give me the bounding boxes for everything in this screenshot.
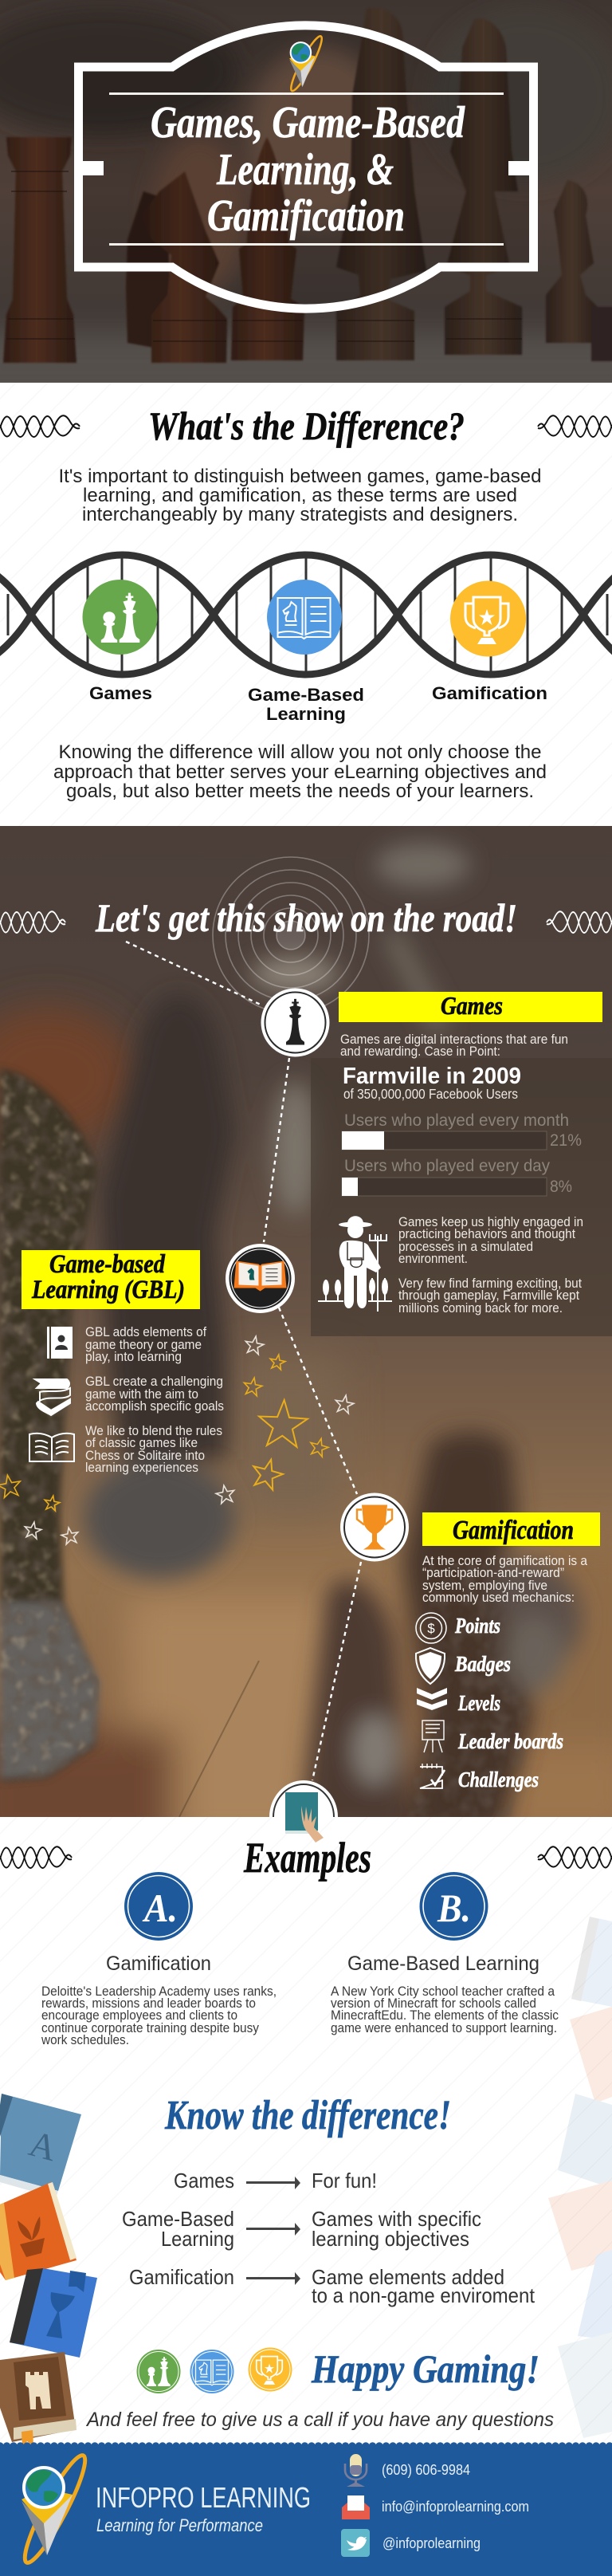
- text: games engagement: Games keep us highly engaged in: [398, 1215, 583, 1229]
- text: Farmville stat: [343, 1064, 521, 1102]
- panel: footer: [0, 2445, 612, 2576]
- panel: hero photo of chess pieces: [0, 0, 612, 395]
- decorative squiggle right: [538, 415, 612, 437]
- bar chart: users who played: Users who played every month: [344, 1111, 569, 1130]
- heading bar: Games: [339, 991, 602, 1022]
- target concentric circles: [213, 857, 369, 1013]
- label: Game-Based Learning: Learning: [266, 704, 346, 724]
- text: Farmville stat: Farmville in 2009: [343, 1064, 521, 1089]
- closing paragraph: goals, but also better meets the needs of your learners.: [66, 781, 534, 802]
- example B: game-based learning: Game-Based Learning: [347, 1953, 539, 1975]
- book: plant: [0, 2182, 76, 2280]
- heading: let's get this show on the road: Let's get this show on the road!: [95, 895, 517, 940]
- text: email: info@infoprolearning.com: [382, 2499, 529, 2515]
- decorative squiggle left: [0, 911, 65, 933]
- label: Levels: Levels: [457, 1691, 500, 1715]
- text: games engagement: environment.: [398, 1252, 468, 1266]
- chart: DNA helix: [0, 555, 612, 674]
- icon: challenges checklist: [420, 1764, 445, 1788]
- decorative squiggle left: [0, 1846, 72, 1868]
- icon: book in hand station: [269, 1780, 338, 1843]
- text: games engagement: practicing behaviors and thought: [398, 1227, 575, 1241]
- icon: twitter: [341, 2529, 370, 2557]
- text: brand name: INFOPRO LEARNING: [96, 2481, 311, 2514]
- decorative squiggle left: [0, 415, 80, 437]
- icon: points coin: $: [427, 1621, 435, 1636]
- label: Gamification: Gamification: [432, 683, 547, 703]
- heading: examples: Examples: [243, 1834, 371, 1882]
- icon: small gold circle: [249, 2347, 292, 2392]
- dashed path connecting stations: [126, 942, 361, 1780]
- book: letter A: A: [25, 2122, 61, 2169]
- title: Games, Game-Based: [151, 98, 465, 147]
- label: Badges: Badges: [454, 1652, 511, 1676]
- text: games description: [340, 1032, 568, 1059]
- panel: dark photo section: [0, 826, 612, 1858]
- comparison table: Game-Based: [122, 2207, 234, 2231]
- text: twitter handle: @infoprolearning: [382, 2535, 481, 2551]
- icon: footer logo: [17, 2450, 93, 2568]
- closing paragraph: Knowing the difference will allow you not only choose the: [59, 741, 542, 763]
- intro paragraph: [59, 466, 542, 525]
- bar chart: users who played: [342, 1111, 582, 1196]
- heading bar: Game-based Learning: Learning (GBL): [31, 1276, 185, 1304]
- example B: game-based learning: [331, 1953, 559, 2035]
- comparison table: [122, 2169, 536, 2307]
- icon: small green circle: [137, 2350, 180, 2393]
- icon: small blue circle: [190, 2350, 234, 2393]
- icon: level chevrons: [417, 1688, 447, 1710]
- comparison table: learning objectives: [312, 2227, 469, 2251]
- text: gamification description: “participation-and-reward”: [422, 1566, 564, 1580]
- comparison table: to a non-game enviroment: [312, 2283, 536, 2307]
- intro paragraph: learning, and gamification, as these terms are used: [83, 485, 517, 506]
- title frame: [74, 26, 538, 309]
- text: games engagement: Very few find farming exciting, but: [398, 1276, 582, 1291]
- icon: book station: [226, 1244, 295, 1313]
- title: Gamification: [207, 191, 405, 241]
- icon: leader board easel: [422, 1721, 444, 1752]
- title: [151, 98, 465, 241]
- text: games engagement: processes in a simulated: [398, 1240, 533, 1254]
- text: GBL points: of classic games like: [85, 1436, 198, 1450]
- text: GBL points: game with the aim to: [85, 1387, 198, 1402]
- bar chart: users who played: 21%: [550, 1131, 582, 1150]
- text: brand name: Learning for Performance: [96, 2515, 263, 2535]
- arrow: row three: [246, 2272, 300, 2285]
- text: games engagement: [398, 1215, 583, 1316]
- text: phone: (609) 606-9984: [382, 2462, 470, 2478]
- intro paragraph: It's important to distinguish between games, game-based: [59, 466, 542, 487]
- example A: gamification: continue corporate training despite busy: [41, 2021, 260, 2035]
- icon: stacked books: [35, 1379, 70, 1415]
- example A: gamification: Gamification: [106, 1953, 211, 1975]
- heading bar: Game-based Learning: Game-based: [49, 1250, 165, 1279]
- text: GBL points: learning experiences: [85, 1461, 198, 1475]
- icon: badge shield: [416, 1648, 445, 1684]
- text: call to action: And feel free to give us a call if you have any questions: [85, 2409, 554, 2431]
- example B: game-based learning: MinecraftEdu. The elements of the classic: [331, 2008, 559, 2023]
- comparison table: Game elements added: [312, 2265, 504, 2289]
- example A: gamification: work schedules.: [41, 2033, 129, 2047]
- closing paragraph: [53, 741, 547, 802]
- example A: gamification: rewards, missions and leader boards to: [41, 1996, 256, 2011]
- icon: points coin: [416, 1613, 446, 1643]
- text: brand name: [96, 2481, 311, 2535]
- icon: stack of books on left: [0, 2094, 97, 2448]
- comparison table: For fun!: [312, 2169, 377, 2193]
- icon: gold gamification circle: [450, 580, 526, 657]
- example A: gamification: [41, 1953, 277, 2047]
- text: games description: and rewarding. Case in Point:: [340, 1044, 500, 1059]
- label: Game-Based Learning: Game-Based: [248, 685, 364, 705]
- icon: small logo in title frame: [287, 33, 326, 93]
- text: games engagement: through gameplay, Farmville kept: [398, 1288, 579, 1303]
- text: gamification description: system, employing five: [422, 1579, 547, 1593]
- intro paragraph: interchangeably by many strategists and designers.: [82, 504, 518, 525]
- book: rook: [0, 2352, 76, 2448]
- example B: game-based learning: game were enhanced to support learning.: [331, 2021, 557, 2035]
- text: gamification description: commonly used mechanics:: [422, 1591, 575, 1605]
- heading: what's the difference: What's the Difference?: [148, 403, 465, 448]
- heading bar: Games: Games: [441, 991, 503, 1020]
- arrow: row two: [246, 2223, 300, 2236]
- example A: gamification: encourage employees and clients to: [41, 2008, 237, 2023]
- book: letter A: [0, 2094, 81, 2198]
- comparison table: Learning: [161, 2227, 234, 2251]
- icon: badge B: B.: [437, 1886, 471, 1930]
- heading bar: Gamification: Gamification: [453, 1516, 574, 1545]
- text: GBL points: [85, 1325, 224, 1475]
- icon: farmer: [318, 1216, 392, 1312]
- example B: game-based learning: version of Minecraft for schools called: [331, 1996, 536, 2011]
- icon: microphone: [345, 2454, 367, 2487]
- comparison table: Games with specific: [312, 2207, 481, 2231]
- text: GBL points: Chess or Solitaire into: [85, 1449, 205, 1463]
- text: GBL points: GBL adds elements of: [85, 1325, 206, 1339]
- decorative squiggle right: [538, 1846, 612, 1868]
- book: trophy: [10, 2268, 97, 2358]
- text: GBL points: We like to blend the rules: [85, 1424, 222, 1438]
- text: gamification description: [422, 1554, 588, 1605]
- label: Leader boards: Leader boards: [457, 1729, 563, 1753]
- decorative squiggle right: [547, 911, 612, 933]
- heading: know the difference: Know the difference!: [164, 2093, 451, 2138]
- heading bar: Game-based Learning: [22, 1250, 200, 1309]
- icon: trophy station: [340, 1493, 409, 1561]
- comparison table: Games: [174, 2169, 234, 2193]
- text: games description: Games are digital interactions that are fun: [340, 1032, 568, 1047]
- icon: faded books on right: [548, 1917, 612, 2438]
- icon: envelope: [342, 2495, 370, 2519]
- text: games engagement: millions coming back for more.: [398, 1301, 563, 1316]
- example B: game-based learning: A New York City school teacher crafted a: [331, 1984, 555, 1999]
- icon: badge A: A.: [142, 1886, 178, 1930]
- text: GBL points: GBL create a challenging: [85, 1375, 223, 1389]
- icon: king station: [261, 989, 330, 1057]
- heading: happy gaming: Happy Gaming!: [311, 2346, 539, 2391]
- title: Learning, &: [216, 145, 394, 195]
- icon: green games circle: [83, 580, 158, 655]
- label: Games: Games: [89, 683, 152, 703]
- icon: open book: [29, 1434, 74, 1461]
- example A: gamification: Deloitte's Leadership Academy uses ranks,: [41, 1984, 277, 1999]
- arrow: row one: [246, 2177, 300, 2189]
- text: GBL points: play, into learning: [85, 1350, 182, 1364]
- comparison table: Gamification: [129, 2265, 234, 2289]
- text: GBL points: accomplish specific goals: [85, 1399, 224, 1414]
- text: GBL points: game theory or game: [85, 1338, 202, 1352]
- icon: badge A: [124, 1872, 193, 1941]
- icon: scattered stars: [0, 1335, 355, 1545]
- icon: blue game-based learning circle: [267, 580, 342, 655]
- icon: contact book: [47, 1327, 73, 1359]
- text: gamification description: At the core of gamification is a: [422, 1554, 588, 1568]
- label: Points: Points: [454, 1614, 500, 1638]
- label: Challenges: Challenges: [458, 1768, 539, 1791]
- text: Farmville stat: of 350,000,000 Facebook Users: [343, 1086, 518, 1102]
- icon: badge B: [419, 1872, 488, 1941]
- closing paragraph: approach that better serves your eLearning objectives and: [53, 761, 547, 783]
- bar chart: users who played: Users who played every day: [344, 1156, 550, 1175]
- bar chart: users who played: 8%: [550, 1177, 572, 1196]
- label: Game-Based Learning: [248, 685, 364, 724]
